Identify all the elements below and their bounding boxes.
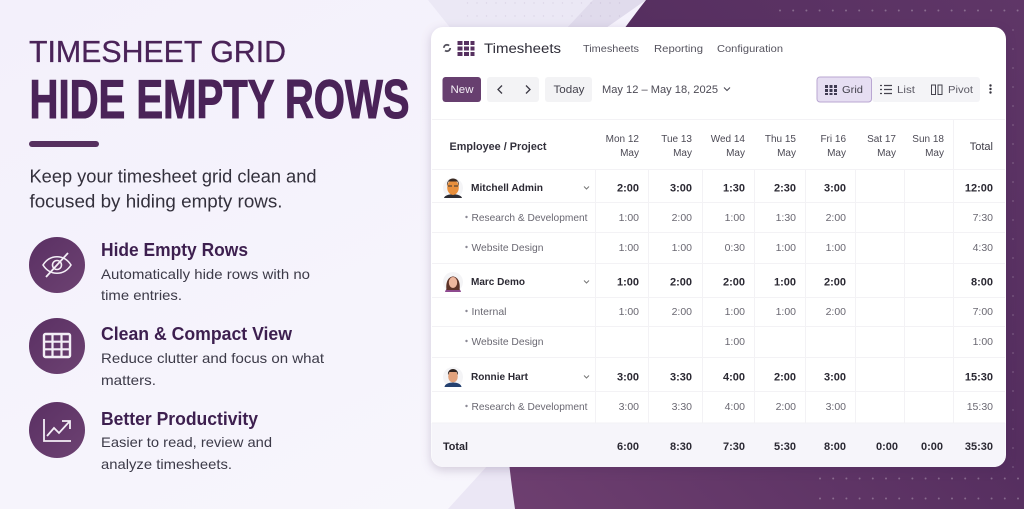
employee row: Marc Demo: Marc Demo — [471, 276, 525, 288]
project row: Website Design: 1:00 — [973, 336, 993, 348]
totals row: 7:30 — [723, 441, 745, 453]
totals row: Total — [443, 441, 468, 453]
project row: Internal: 2:00 — [672, 306, 692, 318]
list view: List — [897, 84, 915, 96]
toolbar — [442, 77, 992, 102]
pivot view: Pivot — [948, 84, 973, 96]
feature title: Hide Empty Rows — [101, 240, 248, 260]
column headers: May — [673, 148, 692, 159]
project row: Internal: 1:00 — [619, 306, 639, 318]
project row: Research and Development: Research & Development — [472, 401, 588, 413]
heading: timesheet grid: TIMESHEET GRID — [29, 34, 286, 69]
employee row: Marc Demo: 1:00 — [774, 276, 796, 288]
employee row: Marc Demo: 2:00 — [824, 276, 846, 288]
nav menu: Configuration — [717, 43, 783, 55]
avatar: Ronnie Hart — [443, 367, 463, 387]
feature: better productivity — [29, 402, 276, 472]
totals row: 8:00 — [824, 441, 846, 453]
employee row: Mitchell Admin: 3:00 — [670, 182, 692, 194]
feature description: Easier to read, review and — [101, 434, 272, 450]
column headers: Tue 13 — [661, 134, 692, 145]
employee row: Ronnie Hart: Ronnie Hart — [471, 371, 528, 383]
panel: timesheets app card — [431, 27, 1006, 467]
nav menu: Timesheets — [583, 43, 639, 55]
intro text: focused by hiding empty rows. — [30, 190, 282, 212]
column headers: Total — [970, 141, 993, 153]
project row: Research and Development — [465, 401, 993, 413]
new button — [442, 77, 481, 102]
feature description: Automatically hide rows with no — [101, 266, 310, 282]
employee row: Mitchell Admin: 1:30 — [723, 182, 745, 194]
project row: Website Design: 1:00 — [826, 242, 846, 254]
employee row: Marc Demo — [443, 272, 993, 292]
feature description: analyze timesheets. — [101, 456, 232, 472]
app title: Timesheets — [484, 41, 561, 56]
feature: clean and compact view — [29, 318, 328, 388]
employee row: Mitchell Admin: 2:30 — [774, 182, 796, 194]
icon: back spinner — [444, 45, 450, 51]
employee row: Marc Demo: 8:00 — [971, 276, 993, 288]
accent bar — [29, 141, 99, 147]
totals row: 35:30 — [965, 441, 993, 453]
project row: Research and Development: 3:00 — [619, 401, 639, 413]
project row: Research and Development: 3:30 — [672, 401, 692, 413]
project row: Website Design: 1:00 — [619, 242, 639, 254]
table footer band — [432, 423, 1006, 467]
project row: Research and Development: 1:00 — [619, 212, 639, 224]
icon: app grid — [458, 41, 474, 56]
project row: Website Design — [465, 242, 993, 254]
employee row: Mitchell Admin: Mitchell Admin — [471, 182, 543, 194]
employee row: Ronnie Hart: 3:00 — [824, 372, 846, 384]
pivot view — [932, 84, 973, 96]
totals row: 0:00 — [921, 441, 943, 453]
column headers: Mon 12 — [606, 134, 639, 145]
app header bar — [444, 41, 783, 56]
column headers — [450, 134, 993, 159]
feature description: matters. — [101, 372, 156, 388]
nav menu: Reporting — [654, 43, 703, 55]
column headers: Fri 16 — [820, 134, 846, 145]
project row: Website Design: Website Design — [472, 242, 544, 254]
employee row: Ronnie Hart — [443, 367, 993, 387]
intro text: Keep your timesheet grid clean and — [30, 166, 316, 186]
employee row: Ronnie Hart: 3:30 — [670, 372, 692, 384]
project row: Internal: Internal — [472, 306, 506, 318]
project row: Website Design: 1:00 — [725, 336, 745, 348]
project row: Research and Development — [465, 212, 993, 224]
project row: Website Design — [465, 336, 993, 348]
column headers: May — [877, 148, 896, 159]
project row: Internal: 1:00 — [725, 306, 745, 318]
feature title: Clean & Compact View — [101, 324, 293, 344]
project row: Internal: 1:00 — [776, 306, 796, 318]
totals row: 6:00 — [617, 441, 639, 453]
totals row — [443, 441, 993, 453]
employee row: Ronnie Hart: 3:00 — [617, 372, 639, 384]
project row: Research and Development: Research & Development — [472, 212, 588, 224]
project row: Website Design: Website Design — [472, 336, 544, 348]
feature title: Better Productivity — [101, 409, 258, 429]
project row: Research and Development: 7:30 — [973, 212, 993, 224]
project row: Research and Development: 3:00 — [826, 401, 846, 413]
column headers: Employee / Project — [450, 141, 547, 153]
today button: Today — [554, 84, 585, 96]
grid view active: Grid — [842, 84, 863, 96]
project row: Website Design: 1:00 — [672, 242, 692, 254]
employee row: Ronnie Hart: 4:00 — [723, 372, 745, 384]
feature description: Reduce clutter and focus on what — [101, 350, 324, 366]
project row: Internal: 7:00 — [973, 306, 993, 318]
employee row: Marc Demo: 1:00 — [617, 276, 639, 288]
employee row: Mitchell Admin — [443, 178, 993, 198]
icon: trend chart — [29, 402, 85, 458]
previous and next buttons — [487, 77, 539, 102]
project row: Research and Development: 2:00 — [776, 401, 796, 413]
project row: Research and Development: 2:00 — [672, 212, 692, 224]
list view — [880, 84, 915, 96]
icon: more menu — [989, 84, 992, 94]
employee row: Mitchell Admin: 3:00 — [824, 182, 846, 194]
project row: Research and Development: 4:00 — [725, 401, 745, 413]
project row: Website Design: 4:30 — [973, 242, 993, 254]
icon: table grid — [29, 318, 85, 374]
project row: Internal: 2:00 — [826, 306, 846, 318]
project row: Website Design: 0:30 — [725, 242, 745, 254]
today button — [545, 77, 592, 102]
project row: Research and Development: 15:30 — [967, 401, 993, 413]
icon: crossed eye — [29, 237, 85, 293]
project row: Research and Development: 1:30 — [776, 212, 796, 224]
column headers: Sun 18 — [912, 134, 944, 145]
project row: Research and Development: 1:00 — [725, 212, 745, 224]
column headers: Wed 14 — [711, 134, 745, 145]
new button: New — [450, 84, 474, 96]
column headers: Sat 17 — [867, 134, 896, 145]
employee row: Ronnie Hart: 2:00 — [774, 372, 796, 384]
heading: hide empty rows: HIDE EMPTY ROWS — [30, 68, 410, 130]
project row: Research and Development: 2:00 — [826, 212, 846, 224]
column headers: May — [620, 148, 639, 159]
date range selector: May 12 – May 18, 2025 — [602, 84, 718, 96]
project row: Website Design: 1:00 — [776, 242, 796, 254]
feature description: time entries. — [101, 287, 182, 303]
column headers: May — [777, 148, 796, 159]
project row: Internal — [465, 306, 993, 318]
totals row: 0:00 — [876, 441, 898, 453]
feature: hide empty rows — [29, 237, 314, 303]
employee row: Marc Demo: 2:00 — [723, 276, 745, 288]
column headers: May — [925, 148, 944, 159]
grid table — [432, 119, 1006, 467]
employee row: Mitchell Admin: 2:00 — [617, 182, 639, 194]
column headers: Thu 15 — [765, 134, 796, 145]
employee row: Marc Demo: 2:00 — [670, 276, 692, 288]
employee row: Mitchell Admin: 12:00 — [965, 182, 993, 194]
column headers: May — [827, 148, 846, 159]
totals row: 8:30 — [670, 441, 692, 453]
view switcher — [817, 77, 980, 102]
nav menu — [583, 43, 783, 55]
totals row: 5:30 — [774, 441, 796, 453]
column headers: May — [726, 148, 745, 159]
avatar: Mitchell Admin — [443, 178, 463, 198]
avatar: Marc Demo — [443, 272, 463, 292]
employee row: Ronnie Hart: 15:30 — [965, 372, 993, 384]
grid view active — [817, 77, 872, 102]
